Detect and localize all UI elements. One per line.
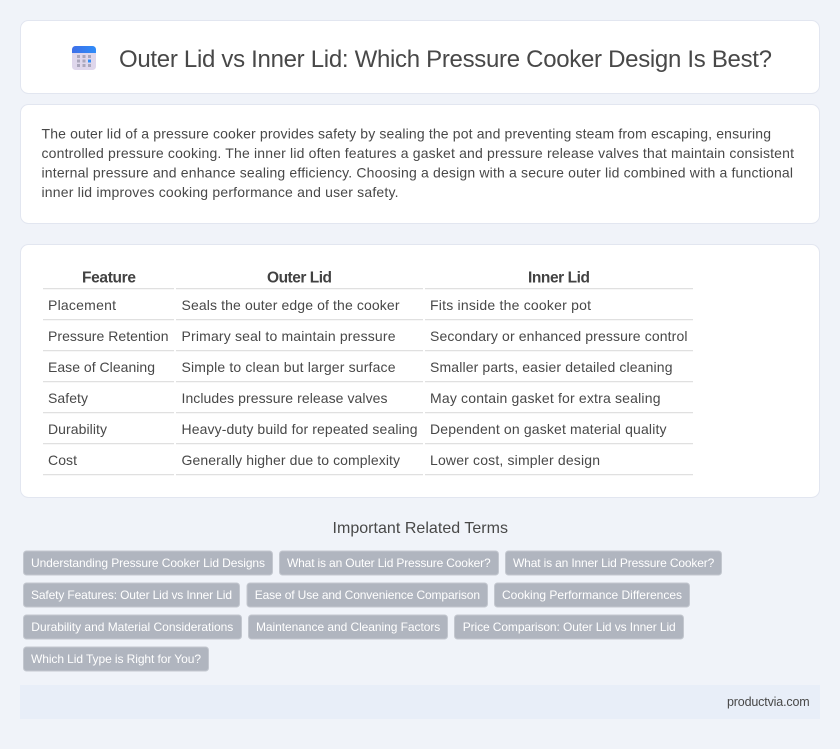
footer text: source: productvia.com <box>727 695 810 709</box>
table header row: Feature <box>82 270 136 286</box>
table row: cost: Generally higher due to complexity <box>182 452 400 468</box>
tag: Cooking Performance Differences <box>502 588 682 602</box>
panel: introduction <box>20 104 820 224</box>
table row: durability: Dependent on gasket material quality <box>430 421 666 437</box>
table header row: Outer Lid <box>267 270 332 286</box>
table row: ease of cleaning: Ease of Cleaning <box>48 359 155 375</box>
tag <box>247 583 488 607</box>
table row: safety: Safety <box>48 390 88 406</box>
text block: description: inner lid improves cooking performance and user safety. <box>42 184 398 200</box>
tag: Which Lid Type is Right for You? <box>31 652 201 666</box>
tag: What is an Inner Lid Pressure Cooker? <box>513 556 715 570</box>
table row: durability <box>48 421 666 437</box>
table row: cost <box>48 452 600 468</box>
tag: Ease of Use and Convenience Comparison <box>255 588 480 602</box>
tag: Maintenance and Cleaning Factors <box>256 620 440 634</box>
table row: cost: Lower cost, simpler design <box>430 452 600 468</box>
tag: Understanding Pressure Cooker Lid Designs <box>31 556 265 570</box>
tag <box>280 551 498 575</box>
panel: comparison table <box>20 244 820 498</box>
table row: placement: Seals the outer edge of the cooker <box>182 297 400 313</box>
title: Outer Lid vs Inner Lid: Which Pressure Cooker Design Is Best? <box>119 46 772 73</box>
tag <box>248 615 448 639</box>
tag: Safety Features: Outer Lid vs Inner Lid <box>31 588 232 602</box>
table header row <box>82 270 590 286</box>
table row: placement: Fits inside the cooker pot <box>430 297 591 313</box>
table row: pressure retention <box>48 328 688 344</box>
tag: Price Comparison: Outer Lid vs Inner Lid <box>463 620 676 634</box>
tag <box>506 551 722 575</box>
footer <box>20 685 820 719</box>
table row: placement <box>48 297 591 313</box>
table row: placement: Placement <box>48 297 116 313</box>
tag <box>24 647 208 671</box>
panel: header <box>20 20 820 94</box>
table row: pressure retention: Pressure Retention <box>48 328 168 344</box>
tag: What is an Outer Lid Pressure Cooker? <box>287 556 491 570</box>
tag <box>494 583 690 607</box>
table row: safety <box>48 390 660 406</box>
table row: pressure retention: Secondary or enhanced pressure control <box>430 328 688 344</box>
table row: ease of cleaning: Simple to clean but larger surface <box>182 359 396 375</box>
text block: description: controlled pressure cooking. The inner lid often features a gasket and pressure release valves that maintain consistent <box>42 145 794 161</box>
table row: ease of cleaning: Smaller parts, easier detailed cleaning <box>430 359 672 375</box>
text block: description: The outer lid of a pressure cooker provides safety by sealing the pot and preventing steam from escaping, ensuring <box>42 126 771 142</box>
table row: safety: May contain gasket for extra sealing <box>430 390 660 406</box>
text block: description: internal pressure and enhance sealing efficiency. Choosing a design with a secure outer lid combined with a functional <box>42 164 793 180</box>
table row: safety: Includes pressure release valves <box>182 390 388 406</box>
table row: cost: Cost <box>48 452 77 468</box>
text block: description <box>42 126 794 200</box>
tag: Durability and Material Considerations <box>31 620 233 634</box>
table row: durability: Heavy-duty build for repeated sealing <box>182 421 418 437</box>
table row: durability: Durability <box>48 421 107 437</box>
table row: pressure retention: Primary seal to maintain pressure <box>182 328 396 344</box>
icon: calendar <box>72 46 96 70</box>
tag <box>24 583 240 607</box>
heading: related terms: Important Related Terms <box>332 520 508 537</box>
related terms tags <box>24 551 722 671</box>
tag <box>454 615 684 639</box>
tag <box>24 615 242 639</box>
table header row: Inner Lid <box>528 270 590 286</box>
tag <box>24 551 272 575</box>
table row: ease of cleaning <box>48 359 672 375</box>
